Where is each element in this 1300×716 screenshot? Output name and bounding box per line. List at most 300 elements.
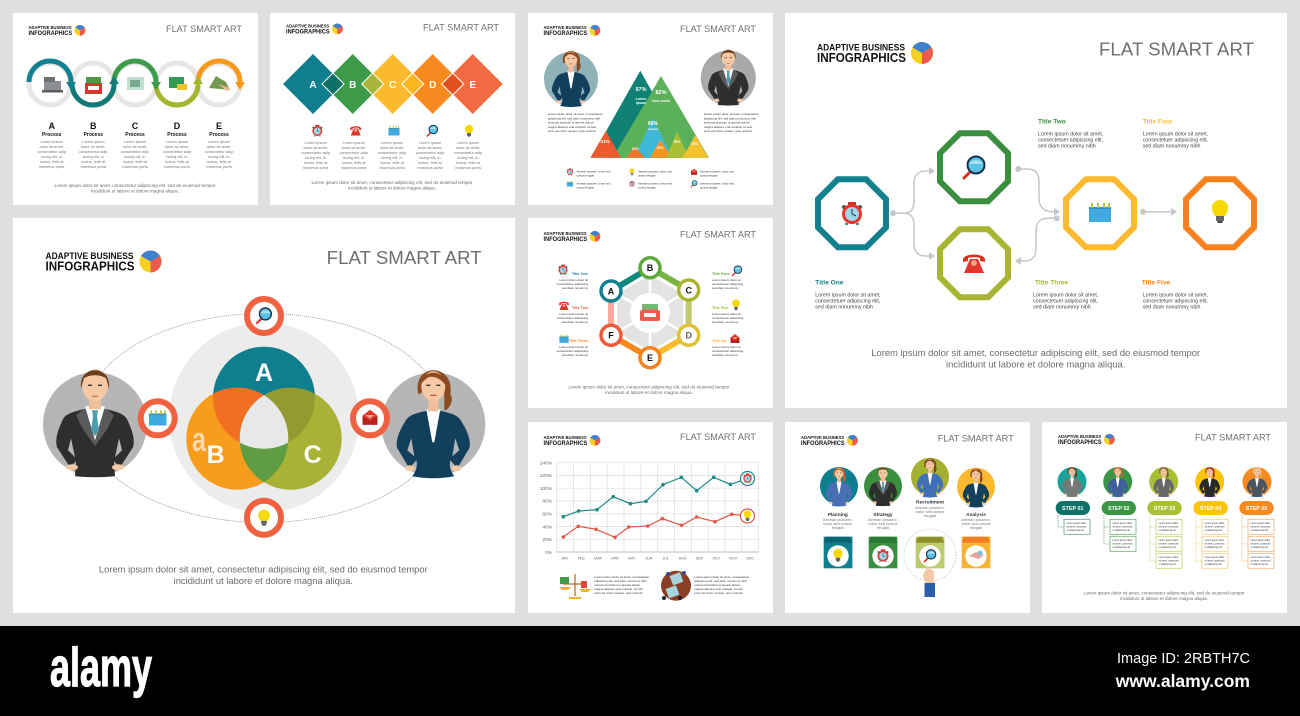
node C: C <box>685 286 692 296</box>
icon: handshake over documents <box>661 571 691 601</box>
step 05 column: Lorem ipsum dolor <box>1250 556 1270 559</box>
column descriptions: maximus porta <box>303 165 329 170</box>
logo: ADAPTIVE BUSINESS <box>544 231 587 236</box>
right labels: Title Five <box>712 306 728 310</box>
triangle chart: Cum sociis <box>652 99 670 103</box>
left labels: Title Two <box>572 306 589 310</box>
footer text: Lorem ipsum dolor sit amet, consectetur adipiscing elit, sed do eiusmod tempor <box>99 564 428 574</box>
line chart: MAY <box>628 556 636 560</box>
logo: INFOGRAPHICS <box>817 51 906 65</box>
step labels: Process <box>167 132 187 138</box>
step 03 column: ur adipiscing elit <box>1158 546 1176 549</box>
step 03 column: Lorem ipsum dolor <box>1158 522 1178 525</box>
left labels: Lorem ipsum dolor sit <box>559 312 588 316</box>
step descriptions: Lorem ipsum <box>82 139 105 144</box>
line chart: 100% <box>540 486 553 492</box>
panel: five step process <box>13 13 258 205</box>
heading: FLAT SMART ART <box>166 24 242 34</box>
step 01 column: STEP 01 <box>1062 506 1084 512</box>
column descriptions: Lorem ipsum <box>342 140 365 145</box>
octagon: magnifier <box>940 133 1008 201</box>
badge: magnifier <box>247 299 281 333</box>
node F: F <box>608 331 614 341</box>
role labels: feugiat <box>924 513 937 518</box>
step 05 column: ur adipiscing elit <box>1250 529 1268 532</box>
step 02 column: sit amet, consectet <box>1112 526 1133 529</box>
text: title five <box>1142 280 1208 311</box>
text: title four: Title Four <box>1143 118 1173 126</box>
line chart: 120% <box>540 473 553 479</box>
text: title four: consectetuer adipiscing elit, <box>1143 138 1208 144</box>
text: title three <box>1033 280 1098 311</box>
step 03 column: Lorem ipsum dolor <box>1158 539 1178 542</box>
legend: Aenean posuere, tortor sed <box>638 170 672 174</box>
heading: FLAT SMART ART <box>1195 433 1271 443</box>
person notes: enim ad minim veniam, quis nostrud <box>704 129 752 133</box>
node E <box>640 348 660 368</box>
step 03 column <box>1147 467 1182 568</box>
footer text: Lorem ipsum dolor sit amet, consectetur adipiscing elit, sed do eiusmod tempor <box>871 347 1200 358</box>
column descriptions: maximus porta <box>379 165 406 170</box>
step 03 column: ur adipiscing elit <box>1158 563 1176 566</box>
badge: calendar <box>141 401 175 435</box>
box: handshake <box>962 537 990 568</box>
icon: sale stand <box>85 77 102 94</box>
panel: overlapping triangles <box>528 13 773 205</box>
panel: team boxes <box>785 422 1030 613</box>
column descriptions: luctus, felis at <box>380 160 405 165</box>
panel: five steps tree <box>1042 422 1287 613</box>
chart notes: adipiscing elit, sed diam nonummy nibh <box>594 579 647 583</box>
column descriptions: maximus porta <box>455 165 482 170</box>
heading: FLAT SMART ART <box>327 247 482 268</box>
step descriptions: dolor sit amet, <box>207 144 231 149</box>
logo: INFOGRAPHICS <box>544 236 587 243</box>
step 04 column: Lorem ipsum dolor <box>1204 539 1224 542</box>
arc chain <box>29 61 245 105</box>
diamonds <box>283 54 503 114</box>
step 02 column: ur adipiscing elit <box>1112 529 1130 532</box>
step labels: B <box>90 121 97 131</box>
step descriptions: maximus porta <box>81 164 107 169</box>
text: title four: Lorem ipsum dolor sit amet, <box>1143 132 1208 138</box>
step 03 column: sit amet, consectet <box>1158 560 1179 563</box>
role labels: Aenean posuere, <box>868 517 898 522</box>
logo: ADAPTIVE BUSINESS <box>28 25 72 30</box>
column descriptions: iscing elit, in <box>457 155 479 160</box>
person: woman <box>381 370 485 478</box>
footer text: Lorem ipsum dolor sit amet, consectetur adipiscing elit, sed do eiusmod tempor <box>568 384 730 390</box>
step 01 column <box>1056 467 1090 534</box>
logo: ADAPTIVE BUSINESS <box>817 43 905 54</box>
logo <box>28 25 85 37</box>
step 03 column: sit amet, consectet <box>1158 526 1179 529</box>
panel: venn diagram <box>13 218 515 613</box>
chart notes: euismod tincidunt ut laoreet dolore <box>694 583 740 587</box>
brand wordmark: alamy <box>50 636 152 698</box>
step 02 column: Lorem ipsum dolor <box>1112 522 1132 525</box>
legend: Aenean posuere, tortor sed <box>700 182 734 186</box>
text: title two: Lorem ipsum dolor sit amet, <box>1038 132 1103 138</box>
column descriptions: dolor sit amet, <box>303 145 328 150</box>
column descriptions: Lorem ipsum <box>381 140 403 145</box>
person notes: euismod tincidunt ut laoreet dolore <box>548 121 594 125</box>
triangle chart <box>590 71 709 158</box>
line chart: OCT <box>713 556 721 560</box>
text: title three: consectetuer adipiscing elit, <box>1033 299 1098 305</box>
octagon: telephone <box>940 229 1008 297</box>
left labels: consectetuer adipiscing <box>557 349 588 353</box>
person notes: magna aliquam erat volutpat. Ut wisi <box>548 125 596 129</box>
column descriptions: iscing elit, in <box>343 155 364 160</box>
role labels: Planning <box>828 512 848 518</box>
line chart: SEP <box>696 556 704 560</box>
node B <box>640 258 660 278</box>
step 04 column: ur adipiscing elit <box>1204 546 1222 549</box>
step descriptions: consectetur adip <box>79 149 108 154</box>
logo: INFOGRAPHICS <box>544 440 587 447</box>
logo <box>46 250 162 274</box>
right labels <box>712 266 744 357</box>
line chart: JUL <box>662 556 669 560</box>
step descriptions: maximus porta <box>39 164 65 169</box>
step descriptions: Lorem ipsum <box>166 139 188 144</box>
step descriptions: maximus porta <box>206 164 233 169</box>
panel: line chart <box>528 422 773 613</box>
step 05 column: sit amet, consectet <box>1250 526 1271 529</box>
step descriptions: luctus, felis at <box>40 159 64 164</box>
step 02 column <box>1102 467 1136 551</box>
right labels: consectetuer adipiscing <box>712 316 744 320</box>
logo: INFOGRAPHICS <box>28 30 72 37</box>
heading: FLAT SMART ART <box>423 23 499 33</box>
right labels: Lorem ipsum dolor sit <box>712 345 741 349</box>
person: man <box>701 49 756 106</box>
column descriptions: consectetur adip <box>378 150 406 155</box>
person notes: Lorem ipsum dolor sit amet, consectetuer <box>548 112 603 116</box>
step labels <box>42 121 229 138</box>
person notes <box>548 112 759 133</box>
text: title three: Lorem ipsum dolor sit amet, <box>1033 293 1098 299</box>
triangle chart: ipsum <box>636 101 646 105</box>
step labels: Process <box>209 132 229 138</box>
diamonds: A <box>309 80 317 91</box>
text: title one: Lorem ipsum dolor sit amet, <box>815 293 881 299</box>
legend: Aenean posuere, tortor sed <box>576 182 610 186</box>
column descriptions: consectetur adip <box>339 150 368 155</box>
step 04 column: ur adipiscing elit <box>1204 563 1222 566</box>
logo <box>286 23 343 35</box>
column descriptions: dolor sit amet, <box>456 145 480 150</box>
footer text: incididunt ut labore et dolore magna aliqua. <box>605 390 693 395</box>
role labels: tortor sed cursus <box>869 521 898 526</box>
step descriptions: luctus, felis at <box>207 159 232 164</box>
legend: cursus feugiat <box>576 186 594 190</box>
logo: ADAPTIVE BUSINESS <box>46 251 134 262</box>
column descriptions: iscing elit, in <box>419 155 441 160</box>
line chart: 80% <box>542 499 553 505</box>
step labels: Process <box>125 132 145 138</box>
footer text: incididunt ut labore et dolore magna aliqua. <box>174 575 353 586</box>
logo: INFOGRAPHICS <box>801 440 845 447</box>
step descriptions: consectetur adip <box>37 149 66 154</box>
column descriptions: maximus porta <box>417 165 444 170</box>
website: www.alamy.com <box>1115 671 1250 691</box>
column descriptions: consectetur adip <box>416 150 444 155</box>
line chart: JUN <box>645 556 653 560</box>
right labels: consectetuer adipiscing <box>712 349 744 353</box>
right labels: Lorem ipsum dolor sit <box>712 312 741 316</box>
left labels: sed diam nonummy <box>562 286 588 290</box>
person: analysis <box>957 468 995 507</box>
step descriptions: luctus, felis at <box>82 159 106 164</box>
step descriptions: Lorem ipsum <box>40 139 63 144</box>
person notes: euismod tincidunt ut laoreet dolore <box>704 121 750 125</box>
step 04 column <box>1193 467 1228 568</box>
node A: A <box>608 286 615 296</box>
line chart: APR <box>611 556 619 560</box>
chart notes: magna aliquam erat volutpat. Ut wisi <box>694 587 743 591</box>
icon: cash in hand <box>209 76 230 91</box>
step descriptions: maximus porta <box>122 164 149 169</box>
step 02 column: STEP 02 <box>1108 506 1130 512</box>
step 04 column: sit amet, consectet <box>1204 543 1225 546</box>
column descriptions: consectetur adip <box>301 150 330 155</box>
line chart: NOV <box>729 556 738 560</box>
role labels: tortor sed cursus <box>962 521 991 526</box>
person notes: magna aliquam erat volutpat. Ut wisi <box>704 125 752 129</box>
logo: ADAPTIVE BUSINESS <box>544 25 587 30</box>
chart notes: magna aliquam erat volutpat. Ut wisi <box>594 587 643 591</box>
left labels: consectetuer adipiscing <box>557 316 588 320</box>
footer text: Lorem ipsum dolor sit amet, consectetur adipiscing elit, sed do eiusmod tempor <box>311 180 473 185</box>
footer text: incididunt ut labore et dolore magna aliqua. <box>946 358 1125 370</box>
left labels: sed diam nonummy <box>562 320 588 324</box>
step 03 column: STEP 03 <box>1154 506 1175 512</box>
logo: ADAPTIVE BUSINESS <box>1058 434 1101 439</box>
line chart: 0% <box>545 550 553 556</box>
right labels: Lorem ipsum dolor sit <box>712 278 741 282</box>
heading: FLAT SMART ART <box>1099 39 1254 60</box>
step 05 column: Lorem ipsum dolor <box>1250 539 1270 542</box>
text: title two: consectetuer adipiscing elit, <box>1038 138 1103 144</box>
diamonds: E <box>469 80 476 91</box>
triangle chart: 13% <box>631 147 639 151</box>
triangle chart: 66% <box>648 121 659 127</box>
box: clock <box>869 537 897 568</box>
footer text: incididunt ut labore et dolore magna aliqua. <box>1120 596 1208 601</box>
step descriptions: dolor sit amet, <box>81 144 106 149</box>
step descriptions: iscing elit, in <box>208 154 230 159</box>
line chart: DEC <box>746 556 754 560</box>
panel: diamond chain <box>270 13 515 205</box>
role labels: tortor sed cursus <box>916 509 945 514</box>
legend: Aenean posuere, tortor sed <box>638 182 672 186</box>
person notes: Lorem ipsum dolor sit amet, consectetuer <box>704 112 759 116</box>
logo <box>801 435 858 447</box>
step descriptions: iscing elit, in <box>83 154 104 159</box>
role labels: Aenean posuere, <box>961 517 991 522</box>
venn circles: B <box>207 441 225 469</box>
column descriptions: dolor sit amet, <box>341 145 366 150</box>
column descriptions: consectetur adip <box>454 150 482 155</box>
step descriptions: dolor sit amet, <box>165 144 189 149</box>
text: title two: sed diam nonummy nibh <box>1038 144 1096 150</box>
heading: FLAT SMART ART <box>680 432 756 442</box>
chart notes: adipiscing elit, sed diam nonummy nibh <box>694 579 747 583</box>
logo <box>544 231 600 243</box>
person: man <box>43 369 147 477</box>
line chart: 40% <box>542 524 553 530</box>
legend: Aenean posuere, tortor sed <box>576 170 610 174</box>
logo: ADAPTIVE BUSINESS <box>286 24 329 29</box>
text: title two: Title Two <box>1038 118 1066 126</box>
triangle chart: 38% <box>673 140 681 144</box>
step descriptions <box>37 139 233 169</box>
left labels: consectetuer adipiscing <box>557 282 588 286</box>
step labels: E <box>216 121 222 131</box>
step 01 column: sit amet, consectet <box>1066 526 1087 529</box>
footer text: Lorem ipsum dolor sit amet, consectetur adipiscing elit, sed do eiusmod tempor <box>1083 590 1245 596</box>
step descriptions: luctus, felis at <box>165 159 190 164</box>
node F <box>601 325 621 345</box>
triangle chart: Aenean <box>648 127 659 131</box>
triangle chart: 82% <box>655 90 667 96</box>
column descriptions: luctus, felis at <box>342 160 366 165</box>
text: title three: sed diam nonummy nibh <box>1033 305 1091 311</box>
step descriptions: dolor sit amet, <box>123 144 147 149</box>
legend: cursus feugiat <box>700 186 718 190</box>
text: title one <box>815 280 881 311</box>
person notes: adipiscing elit, sed diam nonummy nibh <box>548 116 600 120</box>
node E: E <box>647 353 653 363</box>
column descriptions: iscing elit, in <box>305 155 326 160</box>
right labels: sed diam nonummy <box>712 320 739 324</box>
step descriptions: luctus, felis at <box>123 159 148 164</box>
logo: INFOGRAPHICS <box>286 28 330 35</box>
hexagon ring <box>611 268 689 358</box>
person: strategy <box>864 467 902 506</box>
chart notes <box>594 575 749 595</box>
logo: ADAPTIVE BUSINESS <box>801 435 844 440</box>
footer text: incididunt ut labore et dolore magna aliqua. <box>91 188 179 193</box>
column descriptions: luctus, felis at <box>304 160 328 165</box>
step descriptions: Lorem ipsum <box>124 139 146 144</box>
role labels: Recruitment <box>916 500 944 506</box>
step 03 column: Lorem ipsum dolor <box>1158 556 1178 559</box>
step 04 column: Lorem ipsum dolor <box>1204 556 1224 559</box>
diamonds: C <box>389 80 396 91</box>
text: title two <box>1038 118 1103 150</box>
legend: cursus feugiat <box>638 174 656 178</box>
hexagon core <box>612 270 688 356</box>
step 04 column: STEP 04 <box>1200 506 1221 512</box>
step labels: D <box>174 121 181 131</box>
step labels: A <box>48 121 55 131</box>
step 03 column: sit amet, consectet <box>1158 543 1179 546</box>
octagon: light bulb <box>1186 179 1254 247</box>
step 05 column: sit amet, consectet <box>1250 560 1271 563</box>
box: magnifier with dotted ring <box>904 529 956 581</box>
logo: INFOGRAPHICS <box>544 30 587 37</box>
line chart: 140% <box>540 460 553 466</box>
step 04 column: ur adipiscing elit <box>1204 529 1222 532</box>
logo <box>544 25 600 37</box>
text: title one: consectetuer adipiscing elit, <box>815 299 880 305</box>
step 02 column: Lorem ipsum dolor <box>1112 539 1132 542</box>
text: title one: sed diam nonummy nibh <box>815 305 873 311</box>
step 02 column: ur adipiscing elit <box>1112 546 1130 549</box>
box: bulb <box>824 537 852 568</box>
person notes: enim ad minim veniam, quis nostrud <box>548 129 596 133</box>
logo: INFOGRAPHICS <box>46 260 134 274</box>
column descriptions: iscing elit, in <box>381 155 403 160</box>
right labels: Title Four <box>712 272 730 276</box>
step labels: Process <box>84 132 103 138</box>
footer text: incididunt ut labore et dolore magna aliqua. <box>348 185 436 190</box>
role labels: Aenean posuere, <box>915 505 945 510</box>
logo <box>817 42 933 65</box>
step 05 column: STEP 05 <box>1246 506 1267 512</box>
line chart: MAR <box>594 556 602 560</box>
person: planning <box>820 467 858 506</box>
legend: cursus feugiat <box>700 174 718 178</box>
logo <box>1058 434 1115 446</box>
node D: D <box>685 331 692 341</box>
left labels <box>557 265 589 357</box>
triangle chart: Lorem <box>636 97 646 101</box>
column descriptions <box>301 140 482 170</box>
triangle chart: 31% <box>600 139 610 144</box>
step 05 column: sit amet, consectet <box>1250 543 1271 546</box>
octagon: alarm clock <box>818 179 886 247</box>
text: title five: Title Five <box>1142 280 1170 286</box>
right labels: consectetuer adipiscing <box>712 282 744 286</box>
octagon: calendar <box>1066 179 1134 247</box>
connectors <box>890 166 1177 265</box>
icon: scales <box>559 574 591 599</box>
chart notes: euismod tincidunt ut laoreet dolore <box>594 583 640 587</box>
legend: cursus feugiat <box>576 174 594 178</box>
role labels: feugiat <box>970 525 983 530</box>
diamonds: B <box>349 80 356 91</box>
step 02 column: sit amet, consectet <box>1112 543 1133 546</box>
role labels: Analysis <box>966 512 986 518</box>
role labels: feugiat <box>832 525 844 530</box>
step descriptions: maximus porta <box>164 164 191 169</box>
chart notes: Lorem ipsum dolor sit amet, consectetuer <box>694 575 749 579</box>
venn circles: a <box>192 421 207 459</box>
role labels: Aenean posuere, <box>823 517 853 522</box>
role labels: Strategy <box>873 512 893 518</box>
column descriptions: luctus, felis at <box>418 160 443 165</box>
panel: hexagon cycle <box>528 218 773 408</box>
venn circles: C <box>304 441 322 469</box>
column descriptions: dolor sit amet, <box>418 145 442 150</box>
step descriptions: dolor sit amet, <box>39 144 64 149</box>
icon row <box>312 125 473 136</box>
right labels: Title Six <box>712 339 727 343</box>
node B: B <box>647 263 654 273</box>
badge: mail <box>353 401 387 435</box>
chart notes: enim ad minim veniam, quis nostrud <box>694 591 743 595</box>
line chart: 20% <box>542 537 553 543</box>
left labels: Title Three <box>569 339 588 343</box>
person: woman <box>544 51 598 107</box>
triangle chart: 18% <box>656 146 664 150</box>
step labels: Process <box>42 132 62 138</box>
text: title one: Title One <box>815 280 844 286</box>
